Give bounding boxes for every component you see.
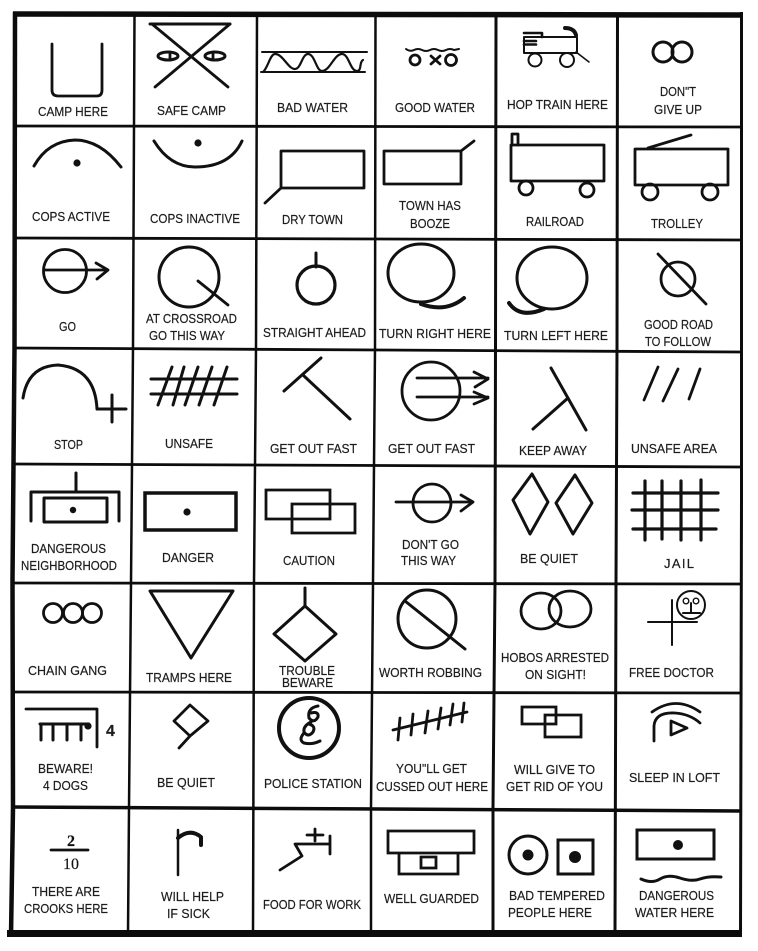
label: town has booze: BOOZE (410, 216, 450, 231)
label: don't give up (654, 84, 702, 117)
label: trouble beware: TROUBLE (279, 663, 335, 678)
cell: will give to get rid of you (506, 707, 603, 794)
icon: stop (23, 365, 126, 422)
icon: crossroad circle (159, 247, 228, 307)
label: hop train here: HOP TRAIN HERE (507, 97, 608, 112)
cell: police station (264, 698, 362, 791)
cell: get out fast arrows (388, 362, 488, 456)
cell: get out fast T (270, 358, 357, 456)
label: bad tempered people here (508, 888, 605, 920)
icon: tally line (393, 703, 467, 740)
cell: caution (266, 490, 355, 568)
label: railroad: RAILROAD (526, 214, 584, 229)
label: trolley: TROLLEY (651, 216, 703, 231)
cell: hop train here (507, 28, 608, 112)
icon: cross with face (648, 591, 705, 645)
cell: cops inactive (150, 139, 242, 226)
label: dangerous water here: WATER HERE (635, 905, 714, 920)
cell: well guarded (384, 831, 479, 906)
label: chain gang: CHAIN GANG (28, 663, 107, 678)
label: at crossroad go this way: GO THIS WAY (149, 328, 225, 343)
cell: don't give up (653, 42, 702, 117)
label: dangerous water here (635, 888, 714, 920)
label: caution: CAUTION (283, 553, 335, 568)
cell: be quiet small diamond (157, 705, 215, 790)
cell: dry town (265, 151, 364, 227)
label: will help if sick (161, 889, 224, 921)
icon: two circles (653, 42, 692, 62)
cell: free doctor (629, 591, 714, 680)
label: good water: GOOD WATER (395, 100, 475, 115)
label: beware 4 dogs: BEWARE! (38, 761, 93, 776)
label: don't go this way: THIS WAY (401, 553, 456, 568)
icon: two boxes (522, 707, 581, 737)
cell: bad water (261, 52, 367, 115)
cell: don't go this way (396, 484, 473, 568)
cell: good road to follow (644, 254, 713, 349)
label: unsafe: UNSAFE (165, 436, 213, 451)
label: stop: STOP (54, 437, 83, 452)
cell: danger (145, 493, 236, 565)
icon: jail grid (632, 480, 718, 540)
label: don't give up: DON"T (660, 84, 696, 99)
icon: circle with arrows (402, 362, 488, 420)
label: you'll get cussed out here: YOU"LL GET (396, 761, 467, 776)
label: don't go this way: DON'T GO (402, 537, 459, 552)
icon: unsafe hatch (151, 367, 237, 405)
icon: police badge (279, 698, 339, 758)
cell: unsafe (151, 367, 237, 451)
label: trouble beware: BEWARE (282, 675, 333, 690)
label: worth robbing: WORTH ROBBING (379, 665, 482, 680)
cell: dangerous neighborhood (21, 473, 119, 573)
label: there are crooks here: THERE ARE (32, 884, 100, 899)
cell: unsafe area (631, 367, 717, 456)
label: turn right here: TURN RIGHT HERE (379, 326, 491, 341)
cell: hobos arrested on sight (501, 591, 609, 682)
label: turn left here: TURN LEFT HERE (504, 328, 608, 343)
label: you'll get cussed out here: CUSSED OUT HERE (376, 779, 488, 794)
icon: cops inactive (154, 139, 242, 167)
icon: loft (652, 704, 700, 741)
cell: railroad (511, 134, 604, 229)
icon: worth robbing (398, 590, 465, 649)
label: hobos arrested on sight: HOBOS ARRESTED (501, 650, 609, 665)
icon: good water (406, 49, 459, 66)
icon: dotted circle and square (509, 836, 593, 874)
cell: camp here (38, 44, 108, 119)
cell: at crossroad go this way (146, 247, 237, 343)
label: town has booze: TOWN HAS (399, 198, 461, 213)
icon: small diamond with tail (174, 705, 208, 748)
icon: trolley (635, 135, 728, 200)
icon: dogs sign: 4 (106, 723, 115, 740)
label: dry town: DRY TOWN (282, 212, 343, 227)
label: danger: DANGER (162, 550, 214, 565)
label: unsafe area: UNSAFE AREA (631, 441, 717, 456)
cell: straight ahead (263, 253, 366, 340)
label: don't give up: GIVE UP (654, 102, 702, 117)
icon: chain (44, 604, 102, 622)
label: there are crooks here (24, 884, 108, 916)
cell: stop (23, 365, 126, 452)
icon: dangerous neighborhood (31, 473, 119, 522)
label: dangerous water here: DANGEROUS (639, 888, 714, 903)
icon: turn left (509, 247, 587, 313)
icon: house (388, 831, 474, 874)
label: will help if sick: WILL HELP (161, 889, 224, 904)
cell: trouble beware (274, 588, 336, 690)
cell: dangerous water here (635, 830, 721, 920)
label: free doctor: FREE DOCTOR (629, 665, 714, 680)
icon: railroad car (511, 134, 604, 197)
label: straight ahead: STRAIGHT AHEAD (263, 325, 366, 340)
cell: town has booze (384, 141, 474, 231)
cell: food for work (263, 829, 361, 912)
icon: don't go (396, 484, 473, 522)
icon: T sign (284, 358, 350, 419)
icon: fraction two tenths (51, 833, 88, 873)
cell: turn right here (379, 244, 491, 341)
cell: chain gang (28, 604, 107, 678)
cell: keep away (519, 368, 587, 458)
label: cops active: COPS ACTIVE (32, 209, 110, 224)
label: go: GO (59, 319, 76, 334)
icon: dry town (265, 151, 364, 203)
label: good road to follow (644, 317, 713, 349)
label: sleep in loft: SLEEP IN LOFT (629, 770, 720, 785)
label: camp here: CAMP HERE (38, 104, 108, 119)
label: jail: JAIL (664, 556, 694, 571)
cell: cops active (32, 140, 121, 224)
label: bad water: BAD WATER (277, 100, 348, 115)
cell: bad tempered people here (508, 836, 605, 920)
cell: safe camp (150, 24, 230, 118)
label: dangerous neighborhood: DANGEROUS (31, 541, 106, 556)
cell: turn left here (504, 247, 608, 343)
icon: two diamonds (513, 474, 592, 534)
label: good road to follow: GOOD ROAD (644, 317, 713, 332)
label: police station: POLICE STATION (264, 776, 362, 791)
label: town has booze (399, 198, 461, 231)
icon: caution (266, 490, 355, 533)
label: get out fast: GET OUT FAST (388, 441, 475, 456)
label: hobos arrested on sight: ON SIGHT! (525, 667, 586, 682)
cell: you'll get cussed out here (376, 703, 488, 794)
icon: three slashes (644, 367, 700, 401)
label: good road to follow: TO FOLLOW (645, 334, 712, 349)
icon: dangerous water (637, 830, 721, 882)
label: safe camp: SAFE CAMP (157, 103, 226, 118)
cell: sleep in loft (629, 704, 720, 785)
cell: worth robbing (379, 590, 482, 680)
icon: train (524, 28, 589, 67)
icon: keep away (533, 368, 586, 430)
icon: fraction two tenths: 10 (63, 856, 79, 873)
label: hobos arrested on sight (501, 650, 609, 682)
icon: turn right (388, 244, 464, 307)
label: dangerous neighborhood (21, 541, 117, 573)
cell: good water (395, 49, 475, 115)
label: dangerous neighborhood: NEIGHBORHOOD (21, 558, 117, 573)
label: get out fast: GET OUT FAST (270, 441, 357, 456)
label: there are crooks here: CROOKS HERE (24, 901, 108, 916)
icon: cane (178, 830, 201, 875)
icon: overlapping circles (521, 591, 591, 629)
icon: bad water (261, 52, 367, 72)
icon: good road (658, 254, 706, 304)
label: beware 4 dogs: 4 DOGS (43, 778, 88, 793)
icon: food for work (280, 829, 330, 870)
cell: there are crooks here (24, 833, 108, 916)
icon: danger (145, 493, 236, 530)
label: tramps here: TRAMPS HERE (146, 670, 232, 685)
icon: safe camp (150, 24, 230, 87)
label: at crossroad go this way (146, 311, 237, 343)
label: you'll get cussed out here (376, 761, 488, 794)
label: be quiet: BE QUIET (157, 775, 215, 790)
icon: town has booze (384, 141, 474, 184)
label: bad tempered people here: PEOPLE HERE (508, 905, 592, 920)
cell: go (44, 250, 108, 334)
label: will give to get rid of you: GET RID OF YOU (506, 779, 603, 794)
cell: jail (632, 480, 718, 571)
label: will help if sick: IF SICK (167, 906, 210, 921)
cell: tramps here (146, 591, 233, 685)
cell: be quiet diamonds (513, 474, 592, 566)
label: will give to get rid of you (506, 762, 603, 794)
icon: diamond with stem (274, 588, 336, 661)
cell: trolley (635, 135, 728, 231)
label: trouble beware (279, 663, 335, 690)
cell: beware 4 dogs (26, 709, 115, 793)
icon: straight ahead (297, 253, 335, 304)
label: food for work: FOOD FOR WORK (263, 897, 361, 912)
label: at crossroad go this way: AT CROSSROAD (146, 311, 237, 326)
label: beware 4 dogs (38, 761, 93, 793)
cell: will help if sick (161, 830, 224, 921)
icon: inverted triangle (150, 591, 233, 658)
icon: fraction two tenths: 2 (67, 833, 75, 850)
label: well guarded: WELL GUARDED (384, 891, 479, 906)
icon: go arrow (44, 250, 108, 292)
label: cops inactive: COPS INACTIVE (150, 211, 240, 226)
label: be quiet: BE QUIET (520, 551, 578, 566)
label: keep away: KEEP AWAY (519, 443, 587, 458)
icon: cops active (34, 140, 121, 167)
label: will give to get rid of you: WILL GIVE TO (514, 762, 595, 777)
label: bad tempered people here: BAD TEMPERED (509, 888, 605, 903)
icon: camp here (52, 44, 102, 96)
label: don't go this way (401, 537, 459, 568)
